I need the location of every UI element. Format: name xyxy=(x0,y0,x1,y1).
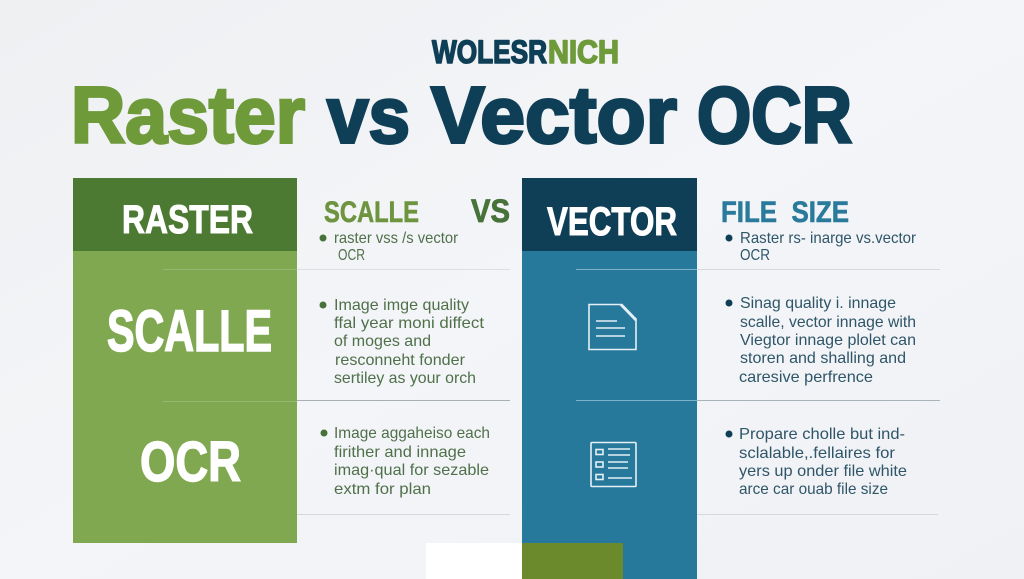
raster header label: RASTER xyxy=(122,198,253,242)
title: Vector xyxy=(431,70,677,160)
vector bullet 1: OCR xyxy=(740,247,770,264)
title xyxy=(71,70,852,160)
vector bullet 2 xyxy=(726,295,916,386)
vector bullet 2: scalle, vector innage with xyxy=(740,314,916,331)
raster bullet 1: OCR xyxy=(338,247,365,264)
title: Raster xyxy=(71,70,305,160)
raster header band xyxy=(73,178,297,251)
raster OCR label: OCR xyxy=(140,430,241,494)
raster bullet 2: of moges and xyxy=(334,333,431,350)
vector bullet 1: Raster rs- inarge vs.vector xyxy=(740,230,917,247)
raster bullet 3: firither and innage xyxy=(334,444,466,461)
brand wordmark: NICH xyxy=(548,34,619,70)
raster bullet 3 xyxy=(320,425,490,498)
raster bullet 2: sertiley as your orch xyxy=(334,370,476,387)
raster bullet 3: Image aggaheiso each xyxy=(334,425,490,442)
bottom accent: white block xyxy=(426,543,522,579)
raster bullet 2: ffal year moni diffect xyxy=(334,315,485,332)
vector bullet 3: yers up onder file white xyxy=(739,463,907,480)
raster bullet 1: raster vss /s vector xyxy=(334,230,459,247)
vector bullet 3: sclalable,.fellaires for xyxy=(739,445,896,462)
vector bullet 3: Propare cholle but ind- xyxy=(739,426,905,443)
vector bullet 2: Sinag quality i. innage xyxy=(740,295,896,312)
icon: checklist xyxy=(591,442,636,486)
raster scale label: SCALLE xyxy=(107,299,272,364)
raster bullet 3: imag·qual for sezable xyxy=(334,462,489,479)
raster bullet 2 xyxy=(320,297,485,387)
heading: file size: FILE SIZE xyxy=(721,196,849,229)
vector bullet 2: Viegtor innage plolet can xyxy=(740,332,916,349)
vector bullet 2: caresive perfrence xyxy=(739,369,873,386)
vector bullet 2: storen and shalling and xyxy=(740,350,906,367)
vector bullet 1 xyxy=(726,230,917,264)
raster bullet 3: extm for plan xyxy=(334,481,431,498)
vector bullet 3: arce car ouab file size xyxy=(739,481,888,498)
raster bullet 2: resconneht fonder xyxy=(335,352,466,369)
title: OCR xyxy=(697,70,852,160)
bottom accent: green block xyxy=(522,543,623,579)
title: vs xyxy=(327,70,410,160)
heading: scale: SCALLE xyxy=(324,196,419,229)
icon: document xyxy=(589,304,636,350)
brand wordmark: WOLESR xyxy=(432,34,547,70)
panel: raster column xyxy=(73,178,297,543)
heading: vs: VS xyxy=(471,193,510,229)
raster bullet 1 xyxy=(320,230,459,264)
vector bullet 3 xyxy=(726,426,907,498)
raster bullet 2: Image imge quality xyxy=(334,297,469,314)
vector header band xyxy=(522,178,697,251)
vector header label: VECTOR xyxy=(547,200,677,244)
panel: vector column xyxy=(426,178,697,579)
